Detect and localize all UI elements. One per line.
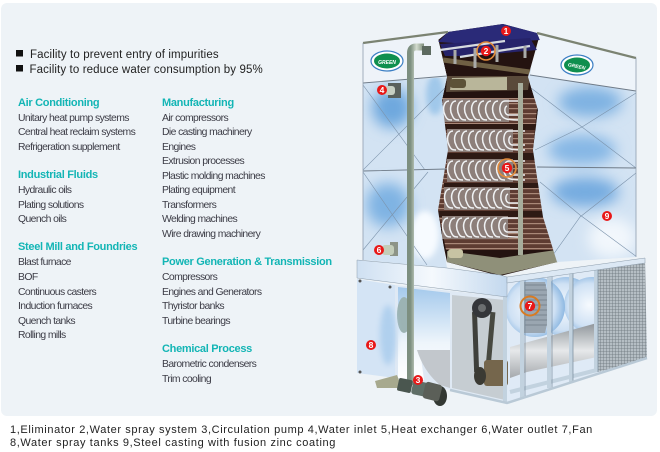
parts legend caption: 1,Eliminator 2,Water spray system 3,Circulation pump 4,Water inlet 5,Heat exchanger 6,Water outlet 7,Fan xyxy=(10,424,593,436)
drive belts and motor xyxy=(472,298,508,386)
steel mill items: Quench tanks xyxy=(18,316,75,327)
marker 9: 9 xyxy=(605,211,610,221)
heading: air conditioning: Air Conditioning xyxy=(18,97,99,109)
cooling tower illustration xyxy=(357,24,647,406)
inner wall xyxy=(446,76,530,92)
manufacturing items: Welding machines xyxy=(162,214,238,225)
water outlet nozzle xyxy=(382,242,398,256)
spray water tank xyxy=(357,279,395,378)
fan shaft xyxy=(510,323,597,378)
blower left xyxy=(397,297,411,333)
steel mill items xyxy=(18,257,97,341)
steel mill items: Rolling mills xyxy=(18,330,66,341)
heading: manufacturing: Manufacturing xyxy=(162,97,234,109)
mesh screen xyxy=(598,260,647,372)
application list: right column xyxy=(162,97,332,385)
collection basin xyxy=(447,250,558,275)
marker 5 xyxy=(498,159,516,177)
steel mill items: BOF xyxy=(18,272,38,283)
slats behind coils xyxy=(438,98,557,250)
circulation pump xyxy=(375,375,447,406)
air conditioning items: Refrigeration supplement xyxy=(18,142,120,153)
marker 9 xyxy=(602,211,612,221)
logo: left xyxy=(371,51,403,71)
application list: left column xyxy=(18,97,137,341)
air conditioning items: Unitary heat pump systems xyxy=(18,113,129,124)
marker 4: 4 xyxy=(380,85,385,95)
base unit xyxy=(357,258,647,403)
marker 4 xyxy=(377,85,387,95)
marker 2 xyxy=(477,42,495,60)
air conditioning items: Central heat reclaim systems xyxy=(18,127,136,138)
manufacturing items: Plating equipment xyxy=(162,185,236,196)
power generation items: Compressors xyxy=(162,272,218,283)
right vertical strut xyxy=(518,83,523,255)
pipe flange xyxy=(422,46,431,55)
manufacturing items: Engines xyxy=(162,142,196,153)
logo: right xyxy=(561,55,593,75)
steel mill items: Induction furnaces xyxy=(18,301,93,312)
marker 3 xyxy=(413,375,423,385)
industrial fluids items xyxy=(18,185,84,225)
parts legend caption: 8,Water spray tanks 9,Steel casting with fusion zinc coating xyxy=(10,437,336,449)
marker 8: 8 xyxy=(369,340,374,350)
logo: left: GREEN xyxy=(378,60,396,66)
industrial fluids items: Plating solutions xyxy=(18,200,84,211)
manufacturing items: Die casting machinery xyxy=(162,127,253,138)
manufacturing items xyxy=(162,113,265,240)
heat exchanger coils xyxy=(442,99,525,239)
tower interior xyxy=(438,24,558,276)
feature bullet list: Facility to reduce water consumption by 95% xyxy=(30,64,263,76)
coil shelves xyxy=(438,124,543,217)
heading: chemical process: Chemical Process xyxy=(162,343,252,355)
marker 1 xyxy=(501,26,511,36)
top band xyxy=(357,260,507,297)
eliminator xyxy=(438,24,540,44)
right face interior xyxy=(507,258,647,403)
frame posts xyxy=(510,266,597,398)
chemical process items xyxy=(162,359,257,385)
right casing xyxy=(528,33,637,262)
marker 3: 3 xyxy=(416,375,421,385)
marker 7: 7 xyxy=(528,301,533,311)
power generation items: Turbine bearings xyxy=(162,316,230,327)
steel mill items: Continuous casters xyxy=(18,287,97,298)
chemical process items: Barometric condensers xyxy=(162,359,257,370)
logo: right: GREEN xyxy=(567,62,586,72)
feature bullet list: Facility to prevent entry of impurities xyxy=(30,49,219,61)
air conditioning items xyxy=(18,113,136,153)
spray pipes xyxy=(440,41,537,73)
manufacturing items: Extrusion processes xyxy=(162,156,245,167)
marker 5: 5 xyxy=(505,163,510,173)
circulation pipe xyxy=(410,47,424,385)
power generation items: Thyristor banks xyxy=(162,301,224,312)
marker 6: 6 xyxy=(377,245,382,255)
marker 2: 2 xyxy=(484,46,489,56)
power generation items: Engines and Generators xyxy=(162,287,262,298)
marker 8 xyxy=(366,340,376,350)
chemical process items: Trim cooling xyxy=(162,374,212,385)
feature bullet list xyxy=(16,49,263,76)
marker 6 xyxy=(374,245,384,255)
marker 7 xyxy=(520,296,540,316)
manufacturing items: Wire drawing machinery xyxy=(162,229,262,240)
steel mill items: Blast furnace xyxy=(18,257,72,268)
manufacturing items: Air compressors xyxy=(162,113,228,124)
industrial fluids items: Quench oils xyxy=(18,214,67,225)
manufacturing items: Transformers xyxy=(162,200,217,211)
heading: industrial fluids: Industrial Fluids xyxy=(18,169,98,181)
left casing xyxy=(363,32,448,268)
left face interior xyxy=(395,285,507,403)
fan housings xyxy=(505,277,620,337)
panel seams xyxy=(530,75,636,168)
manufacturing items: Plastic molding machines xyxy=(162,171,265,182)
frame front edge xyxy=(503,278,507,402)
heading: steel mill: Steel Mill and Foundries xyxy=(18,241,137,253)
marker 1: 1 xyxy=(504,26,509,36)
water inlet nozzle xyxy=(384,83,401,98)
industrial fluids items: Hydraulic oils xyxy=(18,185,72,196)
heading: power generation: Power Generation & Transmission xyxy=(162,256,332,268)
power generation items xyxy=(162,272,262,327)
parts legend caption xyxy=(10,424,593,449)
panel seams xyxy=(363,76,447,171)
